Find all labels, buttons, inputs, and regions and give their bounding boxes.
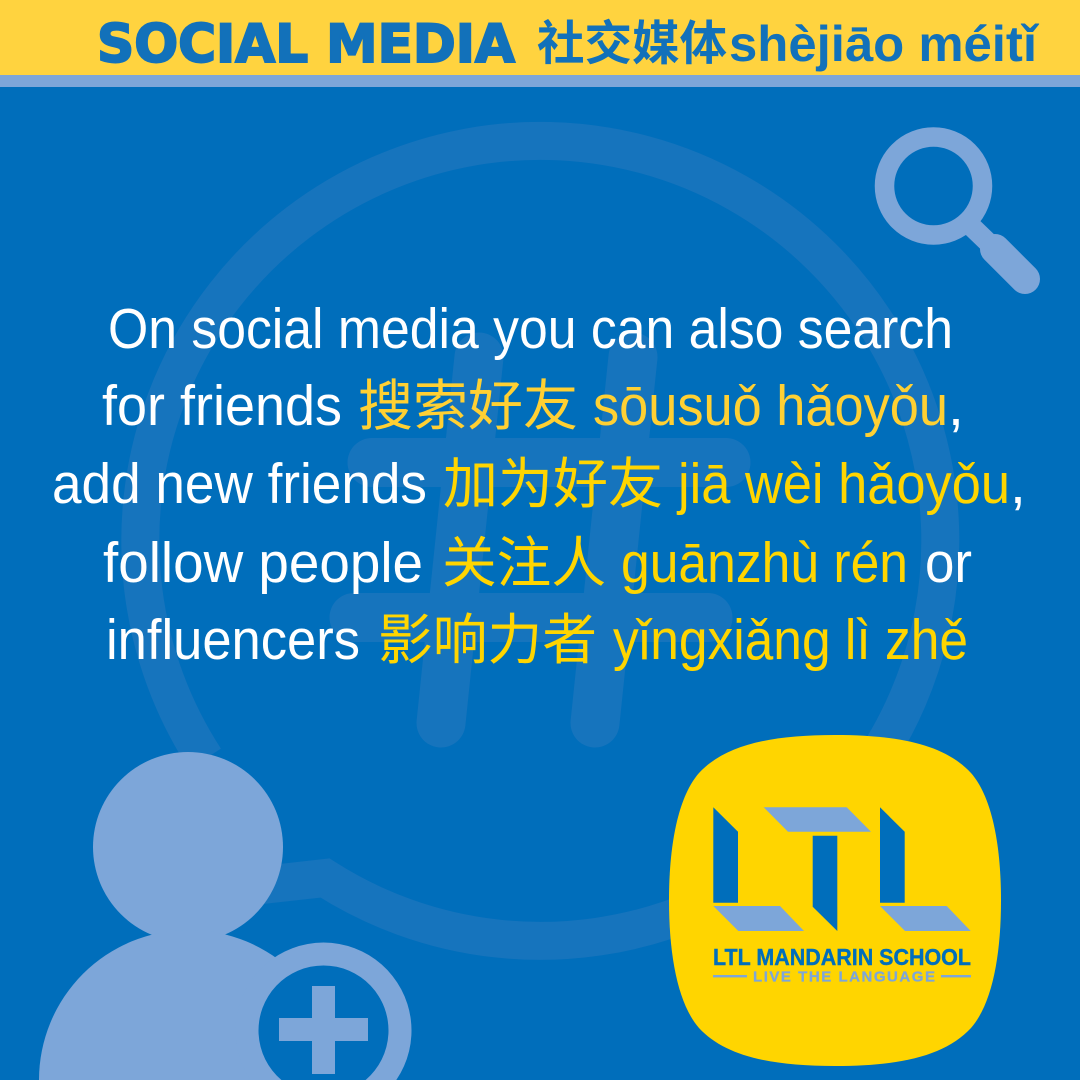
title: Chinese: 社交媒体 <box>537 18 727 71</box>
line 3: jiā wèi hǎoyǒu <box>676 452 1010 516</box>
line 5: influencers <box>106 608 360 672</box>
body text <box>52 297 1026 672</box>
line 5: 影响力者 <box>378 609 597 671</box>
line 4: follow people <box>103 531 423 595</box>
header band <box>0 0 1080 87</box>
line 5: yǐngxiǎng lì zhě <box>613 608 968 672</box>
line 3: 加为好友 <box>443 453 663 515</box>
line 4: 关注人 <box>442 532 606 594</box>
line 2: , <box>948 374 964 438</box>
background speech bubble outline <box>140 141 940 941</box>
line 2 <box>102 374 964 438</box>
line 2: for friends <box>102 374 342 438</box>
line 4 <box>103 531 972 595</box>
line 4: or <box>925 531 972 595</box>
icon: add friend person <box>39 752 411 1080</box>
line 3 <box>52 452 1026 516</box>
title: SOCIAL MEDIA: SOCIAL MEDIA <box>97 14 515 75</box>
line 2: sōusuǒ hǎoyǒu <box>593 374 948 438</box>
logo name: LTL MANDARIN SCHOOL <box>713 944 971 970</box>
title: pinyin: shèjiāo méitǐ <box>729 16 1039 72</box>
line 5 <box>106 608 968 672</box>
line 3: add new friends <box>52 452 427 516</box>
logo tagline: LIVE THE LANGUAGE <box>753 968 935 986</box>
line 2: 搜索好友 <box>358 375 578 437</box>
line 4: guānzhù rén <box>621 531 908 595</box>
icon: magnifying glass <box>884 137 1025 279</box>
logo: LTL Mandarin School <box>669 735 1001 1066</box>
line 1: On social media you can also search <box>108 297 953 361</box>
line 3: , <box>1010 452 1026 516</box>
background hashtag symbol <box>354 357 726 723</box>
